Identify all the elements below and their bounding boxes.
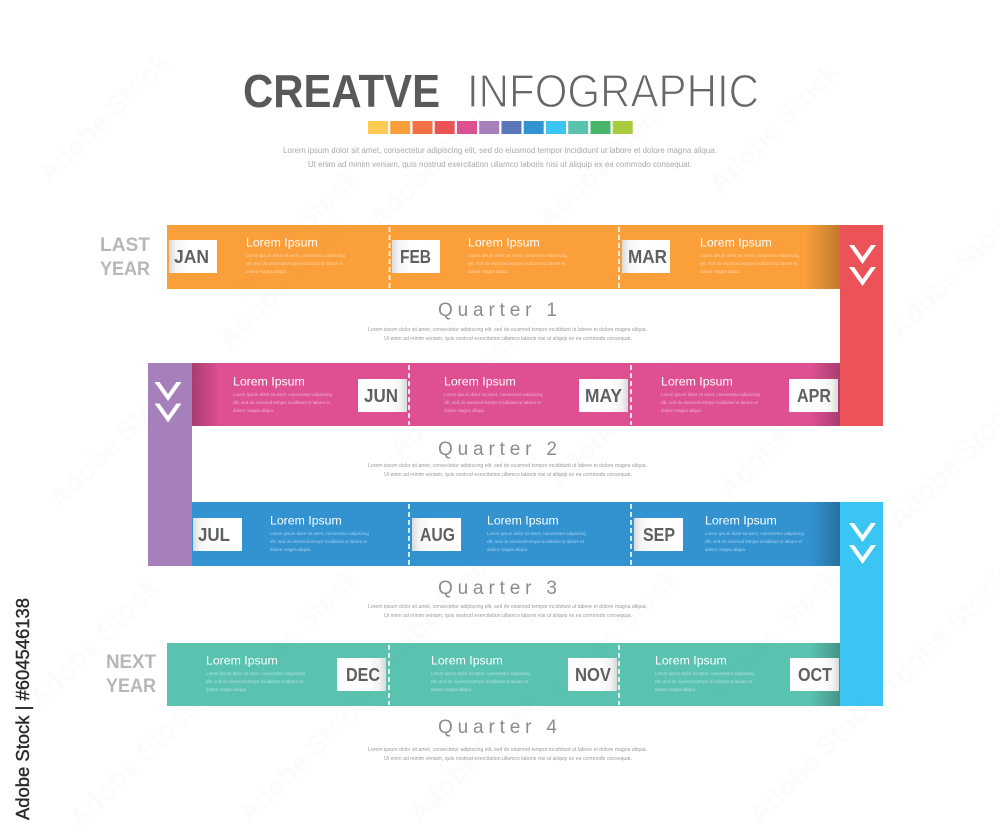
text block: July: [270, 514, 369, 552]
month: MAY: MAY: [585, 386, 622, 406]
text block: November: elit, sed do eiusmod tempor incididunt ut labore et: [431, 679, 529, 684]
text block: January: Lorem Ipsum: [246, 236, 318, 250]
month: JUL: [193, 518, 242, 551]
text block: September: dolore magna aliqua.: [705, 547, 746, 552]
text block: June: dolore magna aliqua.: [233, 408, 274, 413]
month: APR: [789, 379, 838, 412]
band: Q2 pink: [192, 363, 840, 426]
month: JAN: [169, 240, 217, 273]
text block: April: Lorem ipsum dolor sit amet, consectetur adipiscing: [661, 392, 760, 397]
text block: September: Lorem ipsum dolor sit amet, consectetur adipiscing: [705, 531, 804, 536]
month: OCT: [790, 658, 839, 691]
stock watermark: Adobe Stock: [542, 351, 686, 494]
stock watermark: Adobe Stock: [402, 686, 546, 829]
text block: July: Lorem Ipsum: [270, 514, 342, 528]
text block: November: [431, 654, 530, 692]
label: last year: [100, 235, 150, 280]
month: JAN: JAN: [174, 247, 209, 267]
stock watermark: Adobe Stock: [42, 371, 186, 514]
text block: March: [700, 236, 799, 274]
text block: June: [233, 374, 332, 413]
text block: February: Lorem ipsum dolor sit amet, consectetur adipiscing: [468, 253, 567, 258]
text block: January: dolore magna aliqua.: [246, 269, 287, 274]
label: next year: [106, 652, 156, 697]
text block: December: dolore magna aliqua.: [206, 687, 247, 692]
text block: December: elit, sed do eiusmod tempor incididunt ut labore et: [206, 679, 304, 684]
quarter 3 caption: Lorem ipsum dolor sit amet, consectetur adipiscing elit, sed do eiusmod tempor incididunt ut labore et dolore magna aliqua.: [368, 604, 647, 610]
text block: April: [661, 374, 760, 413]
text block: June: Lorem ipsum dolor sit amet, consectetur adipiscing: [233, 392, 332, 397]
text block: April: Lorem Ipsum: [661, 374, 733, 388]
quarter 3 caption: Quarter 3: [438, 578, 557, 599]
quarter 2 caption: [368, 439, 647, 478]
stock watermark: Adobe Stock: [702, 561, 846, 704]
text block: February: Lorem Ipsum: [468, 236, 540, 250]
stock watermark: Adobe Stock: [362, 91, 506, 234]
intro text: [283, 145, 717, 169]
text block: August: dolore magna aliqua.: [487, 547, 528, 552]
month: JUN: [358, 379, 407, 412]
colour swatch strip: [368, 121, 633, 134]
label: next year: NEXT: [106, 652, 156, 673]
text block: May: elit, sed do eiusmod tempor incididunt ut labore et: [444, 400, 542, 405]
text block: April: dolore magna aliqua.: [661, 408, 702, 413]
text block: February: dolore magna aliqua.: [468, 269, 509, 274]
connector: purple column with chevrons: [148, 363, 192, 566]
quarter 3 caption: Ut enim ad minim veniam, quis nostrud exercitation ullamco laboris nisi ut aliquip ex ea commodo consequat.: [384, 613, 632, 619]
text block: October: elit, sed do eiusmod tempor incididunt ut labore et: [655, 679, 753, 684]
month: DEC: [337, 658, 386, 691]
text block: July: dolore magna aliqua.: [270, 547, 311, 552]
text block: October: Lorem ipsum dolor sit amet, consectetur adipiscing: [655, 671, 754, 676]
text block: January: elit, sed do eiusmod tempor incididunt ut labore et: [246, 261, 344, 266]
month: AUG: [412, 518, 461, 551]
connector: red column with chevrons: [840, 225, 883, 426]
text block: August: Lorem Ipsum: [487, 514, 559, 528]
text block: February: [468, 236, 567, 274]
text block: June: Lorem Ipsum: [233, 374, 305, 388]
stock watermark: Adobe Stock: [232, 686, 376, 829]
text block: December: Lorem Ipsum: [206, 654, 278, 668]
text block: December: Lorem ipsum dolor sit amet, consectetur adipiscing: [206, 671, 305, 676]
quarter 3 caption: [368, 578, 647, 619]
month: MAY: [579, 379, 628, 412]
month: NOV: [568, 658, 617, 691]
quarter 2 caption: Lorem ipsum dolor sit amet, consectetur adipiscing elit, sed do eiusmod tempor incididunt ut labore et dolore magna aliqua.: [368, 463, 647, 469]
stock watermark: Adobe Stock: [742, 686, 886, 829]
title: CREATVE: [243, 65, 440, 117]
quarter 2 caption: Quarter 2: [438, 439, 557, 460]
quarter 4 caption: [368, 717, 647, 762]
label: last year: YEAR: [100, 259, 150, 280]
text block: January: Lorem ipsum dolor sit amet, consectetur adipiscing: [246, 253, 345, 258]
text block: November: Lorem ipsum dolor sit amet, consectetur adipiscing: [431, 671, 530, 676]
month: JUL: JUL: [198, 525, 230, 545]
stock watermark: Adobe Stock: [22, 571, 166, 714]
text block: May: [444, 374, 543, 413]
quarter 1 caption: [368, 300, 647, 342]
title: [243, 65, 759, 117]
text block: July: Lorem ipsum dolor sit amet, consectetur adipiscing: [270, 531, 369, 536]
text block: August: [487, 514, 586, 552]
text block: June: elit, sed do eiusmod tempor incididunt ut labore et: [233, 400, 331, 405]
title: INFOGRAPHIC: [467, 65, 759, 117]
stock id vertical label: Adobe Stock | #604546138: [13, 598, 33, 820]
intro text: Lorem ipsum dolor sit amet, consectetur adipiscing elit, sed do eiusmod tempor incididunt ut labore et dolore magna aliqua.: [283, 145, 717, 155]
month: APR: APR: [797, 386, 831, 406]
month: MAR: MAR: [628, 247, 667, 267]
intro text: Ut enim ad minim veniam, quis nostrud exercitation ullamco laboris nisi ut aliquip ex ea commodo consequat.: [308, 159, 692, 169]
month: OCT: OCT: [798, 665, 832, 685]
text block: May: dolore magna aliqua.: [444, 408, 485, 413]
text block: November: Lorem Ipsum: [431, 654, 503, 668]
stock watermark: Adobe Stock: [382, 321, 526, 464]
month: DEC: DEC: [346, 665, 380, 685]
month: AUG: AUG: [420, 525, 455, 545]
month: NOV: NOV: [575, 665, 611, 685]
month: SEP: SEP: [643, 525, 675, 545]
text block: August: elit, sed do eiusmod tempor incididunt ut labore et: [487, 539, 585, 544]
quarter 1 caption: Quarter 1: [438, 300, 557, 321]
text block: October: Lorem Ipsum: [655, 654, 727, 668]
month: SEP: [634, 518, 683, 551]
text block: March: Lorem Ipsum: [700, 236, 772, 250]
stock watermark: Adobe Stock: [62, 691, 206, 834]
quarter 2 caption: Ut enim ad minim veniam, quis nostrud exercitation ullamco laboris nisi ut aliquip ex ea commodo consequat.: [384, 472, 632, 478]
month: FEB: FEB: [400, 247, 431, 267]
stock watermark: Adobe Stock: [712, 361, 856, 504]
text block: July: elit, sed do eiusmod tempor incididunt ut labore et: [270, 539, 368, 544]
quarter 4 caption: Ut enim ad minim veniam, quis nostrud exercitation ullamco laboris nisi ut aliquip ex ea commodo consequat.: [384, 756, 632, 762]
label: next year: YEAR: [106, 676, 156, 697]
text block: January: [246, 236, 345, 274]
text block: September: [705, 514, 804, 552]
stock watermark: Adobe Stock: [702, 56, 846, 199]
month: JUN: JUN: [364, 386, 398, 406]
month: FEB: [392, 240, 440, 273]
text block: May: Lorem Ipsum: [444, 374, 516, 388]
stock watermark: Adobe Stock: [532, 91, 676, 234]
text block: August: Lorem ipsum dolor sit amet, consectetur adipiscing: [487, 531, 586, 536]
connector: cyan column with chevrons: [840, 502, 883, 706]
stock watermark: Adobe Stock: [212, 211, 356, 354]
label: last year: LAST: [100, 235, 150, 256]
text block: February: elit, sed do eiusmod tempor incididunt ut labore et: [468, 261, 566, 266]
band: Q1 orange: [167, 225, 840, 289]
text block: November: dolore magna aliqua.: [431, 687, 472, 692]
stock watermark: Adobe Stock: [542, 561, 686, 704]
stock watermark: Adobe Stock: [222, 561, 366, 704]
text block: April: elit, sed do eiusmod tempor incididunt ut labore et: [661, 400, 759, 405]
quarter 4 caption: Quarter 4: [438, 717, 557, 738]
text block: March: Lorem ipsum dolor sit amet, consectetur adipiscing: [700, 253, 799, 258]
quarter 1 caption: Ut enim ad minim veniam, quis nostrud exercitation ullamco laboris nisi ut aliquip ex ea commodo consequat.: [384, 336, 632, 342]
band: Q3 blue: [192, 502, 840, 566]
stock watermark: Adobe Stock: [222, 161, 366, 304]
text block: December: [206, 654, 305, 692]
text block: October: [655, 654, 754, 692]
text block: October: dolore magna aliqua.: [655, 687, 696, 692]
text block: March: dolore magna aliqua.: [700, 269, 741, 274]
month: MAR: [622, 240, 670, 273]
text block: September: elit, sed do eiusmod tempor incididunt ut labore et: [705, 539, 803, 544]
quarter 4 caption: Lorem ipsum dolor sit amet, consectetur adipiscing elit, sed do eiusmod tempor incididunt ut labore et dolore magna aliqua.: [368, 747, 647, 753]
text block: March: elit, sed do eiusmod tempor incididunt ut labore et: [700, 261, 798, 266]
stock watermark: Adobe Stock: [362, 541, 506, 684]
stock watermark: Adobe Stock: [32, 46, 176, 189]
text block: September: Lorem Ipsum: [705, 514, 777, 528]
quarter 1 caption: Lorem ipsum dolor sit amet, consectetur adipiscing elit, sed do eiusmod tempor incididunt ut labore et dolore magna aliqua.: [368, 327, 647, 333]
band: Q4 teal: [167, 643, 840, 706]
text block: May: Lorem ipsum dolor sit amet, consectetur adipiscing: [444, 392, 543, 397]
